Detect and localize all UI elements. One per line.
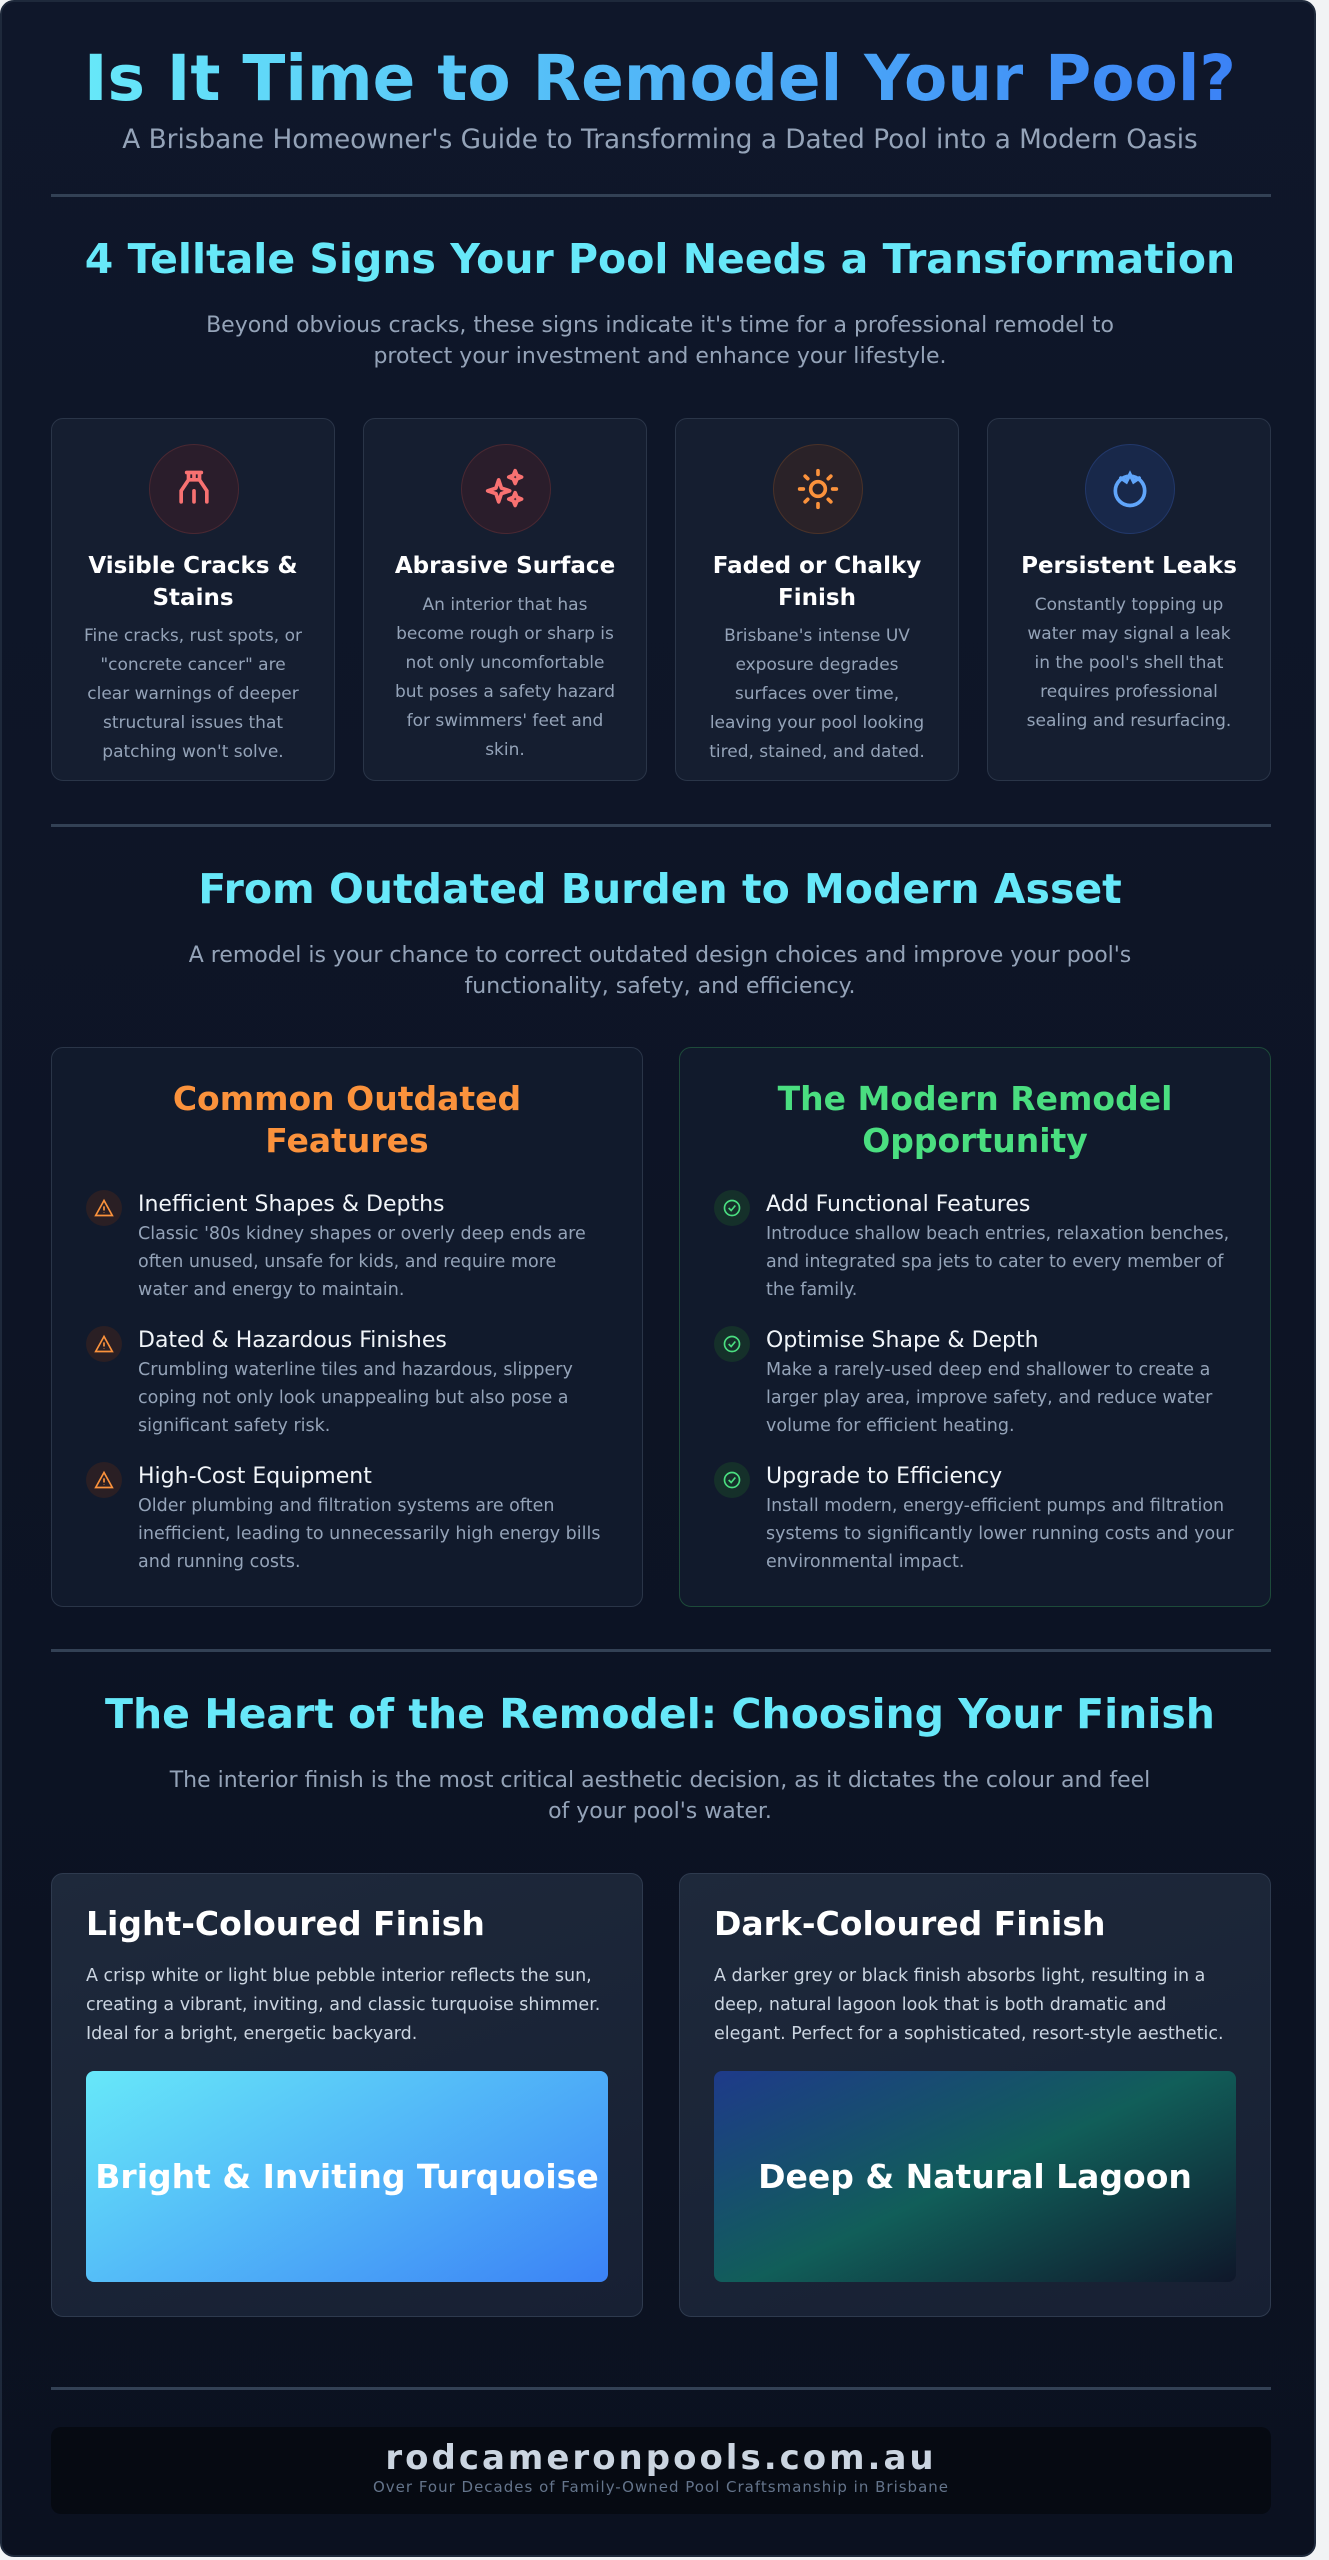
item: finishes: Dated & Hazardous Finishes (138, 1328, 447, 1353)
card: abrasive: An interior that has become rough or sharp is not only uncomfortable but poses a safety hazard for swimmers' feet and skin. (395, 595, 615, 760)
card: leaks: Constantly topping up water may signal a leak in the pool's shell that requires professional sealing and resurfacing. (1027, 595, 1231, 731)
heading: modern asset: From Outdated Burden to Modern Asset (198, 865, 1122, 913)
heading: finish: The Heart of the Remodel: Choosing Your Finish (105, 1690, 1215, 1738)
icon: sparkles (461, 444, 551, 534)
card: cracks: Visible Cracks & Stains (88, 553, 298, 611)
intro: finish: The interior finish is the most critical aesthetic decision, as it dictates the colour and feel of your pool's water. (170, 1768, 1150, 1824)
card: abrasive (363, 418, 647, 781)
item: efficiency: Upgrade to Efficiency (766, 1464, 1002, 1489)
item: features (714, 1190, 1229, 1300)
item: efficiency (714, 1462, 1234, 1572)
item: equipment (86, 1462, 600, 1572)
heading: signs: 4 Telltale Signs Your Pool Needs a Transformation (85, 235, 1235, 283)
panel: outdated features: Common Outdated (173, 1079, 521, 1118)
card: faded: Faded or Chalky Finish (713, 553, 921, 611)
icon: cracks (149, 444, 239, 534)
subtitle: A Brisbane Homeowner's Guide to Transforming a Dated Pool into a Modern Oasis (122, 125, 1198, 155)
intro: signs: Beyond obvious cracks, these signs indicate it's time for a professional remodel to protect your investment and enhance your lifestyle. (206, 313, 1114, 369)
card: light finish: A crisp white or light blue pebble interior reflects the sun, creating a vibrant, inviting, and classic turquoise shimmer. Ideal for a bright, energetic backyard. (86, 1966, 600, 2044)
card: light finish (51, 1873, 643, 2317)
intro: modern asset: A remodel is your chance to correct outdated design choices and improve your pool's functionality, safety, and efficiency. (189, 943, 1131, 999)
footer: rodcameronpools.com.au (385, 2438, 937, 2478)
card: cracks (51, 418, 335, 781)
swatch: turquoise (86, 2071, 608, 2282)
card: dark finish: A darker grey or black finish absorbs light, resulting in a deep, natural lagoon look that is both dramatic and elegant. Perfect for a sophisticated, resort-style aesthetic. (714, 1966, 1224, 2044)
item: shape: Make a rarely-used deep end shallower to create a larger play area, improve safety, and reduce water volume for efficient heating. (766, 1360, 1212, 1436)
card: dark finish: Dark-Coloured Finish (714, 1904, 1106, 1943)
item: shapes: Classic '80s kidney shapes or overly deep ends are often unused, unsafe for kids, and require more water and energy to maintain. (138, 1224, 586, 1300)
icon: sun (773, 444, 863, 534)
card: leaks (987, 418, 1271, 781)
card: abrasive: Abrasive Surface (395, 553, 615, 579)
item: shape (714, 1326, 1212, 1436)
panel: modern opportunity: The Modern Remodel (778, 1079, 1172, 1118)
panel: modern opportunity (679, 1047, 1271, 1607)
item: efficiency: Install modern, energy-efficient pumps and filtration systems to significantly lower running costs and your environmental impact. (766, 1496, 1234, 1572)
item: shape: Optimise Shape & Depth (766, 1328, 1039, 1353)
panel: outdated features (51, 1047, 643, 1607)
item: equipment: High-Cost Equipment (138, 1464, 372, 1489)
item: finishes (86, 1326, 573, 1436)
swatch: turquoise: Bright & Inviting Turquoise (95, 2157, 599, 2196)
card: faded: Brisbane's intense UV exposure degrades surfaces over time, leaving your pool looking tired, stained, and dated. (709, 626, 925, 762)
card: cracks: Fine cracks, rust spots, or "concrete cancer" are clear warnings of deeper structural issues that patching won't solve. (84, 626, 302, 762)
item: equipment: Older plumbing and filtration systems are often inefficient, leading to unnecessarily high energy bills and running costs. (138, 1496, 600, 1572)
item: shapes (86, 1190, 586, 1300)
panel: outdated features: Features (265, 1121, 429, 1160)
icon: leak (1085, 444, 1175, 534)
swatch: lagoon (714, 2071, 1236, 2282)
panel: modern opportunity: Opportunity (862, 1121, 1088, 1160)
card: light finish: Light-Coloured Finish (86, 1904, 485, 1943)
card: dark finish (679, 1873, 1271, 2317)
item: shapes: Inefficient Shapes & Depths (138, 1192, 445, 1217)
footer: Over Four Decades of Family-Owned Pool Craftsmanship in Brisbane (373, 2478, 949, 2496)
item: features: Add Functional Features (766, 1192, 1030, 1217)
swatch: lagoon: Deep & Natural Lagoon (758, 2157, 1192, 2196)
item: finishes: Crumbling waterline tiles and hazardous, slippery coping not only look unappealing but also pose a significant safety risk. (138, 1360, 573, 1436)
item: features: Introduce shallow beach entries, relaxation benches, and integrated spa jets to cater to every member of the family. (766, 1224, 1229, 1300)
footer (51, 2427, 1271, 2514)
card: faded (675, 418, 959, 781)
title: Is It Time to Remodel Your Pool? (84, 42, 1236, 115)
card: leaks: Persistent Leaks (1021, 553, 1237, 579)
